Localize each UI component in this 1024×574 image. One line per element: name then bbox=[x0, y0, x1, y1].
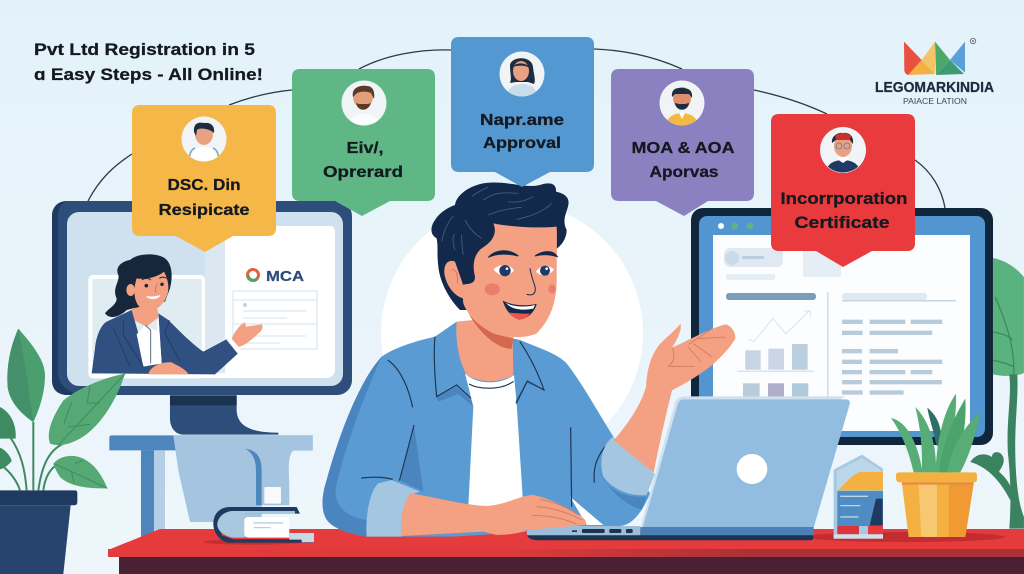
title: ɑ Easy Steps - All Online! bbox=[34, 65, 263, 84]
avatar 3 bbox=[500, 52, 544, 97]
step 4: MOA and AOA: Aporvas bbox=[650, 164, 719, 181]
laptop logo bbox=[737, 454, 767, 484]
monitor stand bbox=[170, 395, 278, 435]
head bbox=[431, 183, 569, 337]
title bbox=[34, 40, 263, 84]
step 1: DSC, DIN bbox=[132, 105, 276, 252]
step 2: EIV, operated bbox=[292, 69, 435, 216]
dashboard chart bbox=[737, 310, 814, 398]
left forearm and hand on keyboard bbox=[401, 493, 586, 536]
form on monitor bbox=[233, 291, 317, 349]
connector arcs between steps bbox=[88, 49, 945, 208]
logo: PAIACE LATION bbox=[903, 97, 967, 106]
white circle behind presenter bbox=[381, 202, 643, 464]
woman's hair bbox=[105, 254, 172, 317]
step 5: incorporation certificate: Incorrporation bbox=[780, 190, 908, 208]
left monitor bbox=[52, 201, 352, 435]
step 1: DSC, DIN: DSC. Din bbox=[168, 177, 240, 194]
dashboard text lines bbox=[842, 320, 942, 395]
step 5: incorporation certificate bbox=[771, 114, 915, 267]
left plant bbox=[0, 329, 125, 574]
step 2: EIV, operated: Eiv/, bbox=[346, 140, 384, 157]
laptop bbox=[527, 396, 850, 540]
right monitor bbox=[691, 208, 993, 445]
title: Pvt Ltd Registration in 5 bbox=[34, 40, 255, 59]
video call panel with woman bbox=[88, 254, 263, 378]
right cuff bbox=[598, 467, 647, 510]
step 3: name approval bbox=[451, 37, 594, 187]
avatar 5 bbox=[820, 127, 866, 173]
woman's jacket bbox=[92, 310, 240, 374]
step 5: incorporation certificate: Certificate bbox=[794, 214, 890, 232]
right background plant bbox=[970, 258, 1024, 529]
screen toolbar bbox=[724, 248, 956, 402]
step 4: MOA and AOA: MOA & AOA bbox=[632, 140, 735, 157]
avatar 2 bbox=[342, 80, 386, 126]
small potted plant bbox=[890, 394, 990, 540]
MCA logo and label bbox=[248, 268, 304, 285]
neck shadow bbox=[468, 313, 513, 349]
step 4: MOA and AOA bbox=[611, 69, 754, 216]
logo bbox=[875, 38, 994, 106]
torso: shirt, tee, cuff and folds bbox=[323, 320, 655, 537]
step 2: EIV, operated: Oprerard bbox=[323, 164, 403, 181]
left cuff bbox=[366, 480, 420, 537]
step 3: name approval: Approval bbox=[483, 135, 561, 152]
right forearm and hand bbox=[614, 324, 735, 473]
red desk bbox=[108, 529, 1024, 574]
avatar 1 bbox=[182, 116, 226, 162]
logo: LEGOMARKINDIA bbox=[875, 79, 994, 96]
blue side table bbox=[109, 435, 313, 537]
step 1: DSC, DIN: Resipicate bbox=[158, 202, 250, 219]
trophy on desk bbox=[832, 455, 889, 540]
logo mark bbox=[904, 38, 976, 75]
step 3: name approval: Napr.ame bbox=[480, 112, 564, 129]
avatar 4 bbox=[660, 80, 704, 126]
book on desk bbox=[203, 507, 314, 545]
presenter bbox=[323, 183, 735, 537]
MCA logo and label: MCA bbox=[266, 268, 304, 285]
